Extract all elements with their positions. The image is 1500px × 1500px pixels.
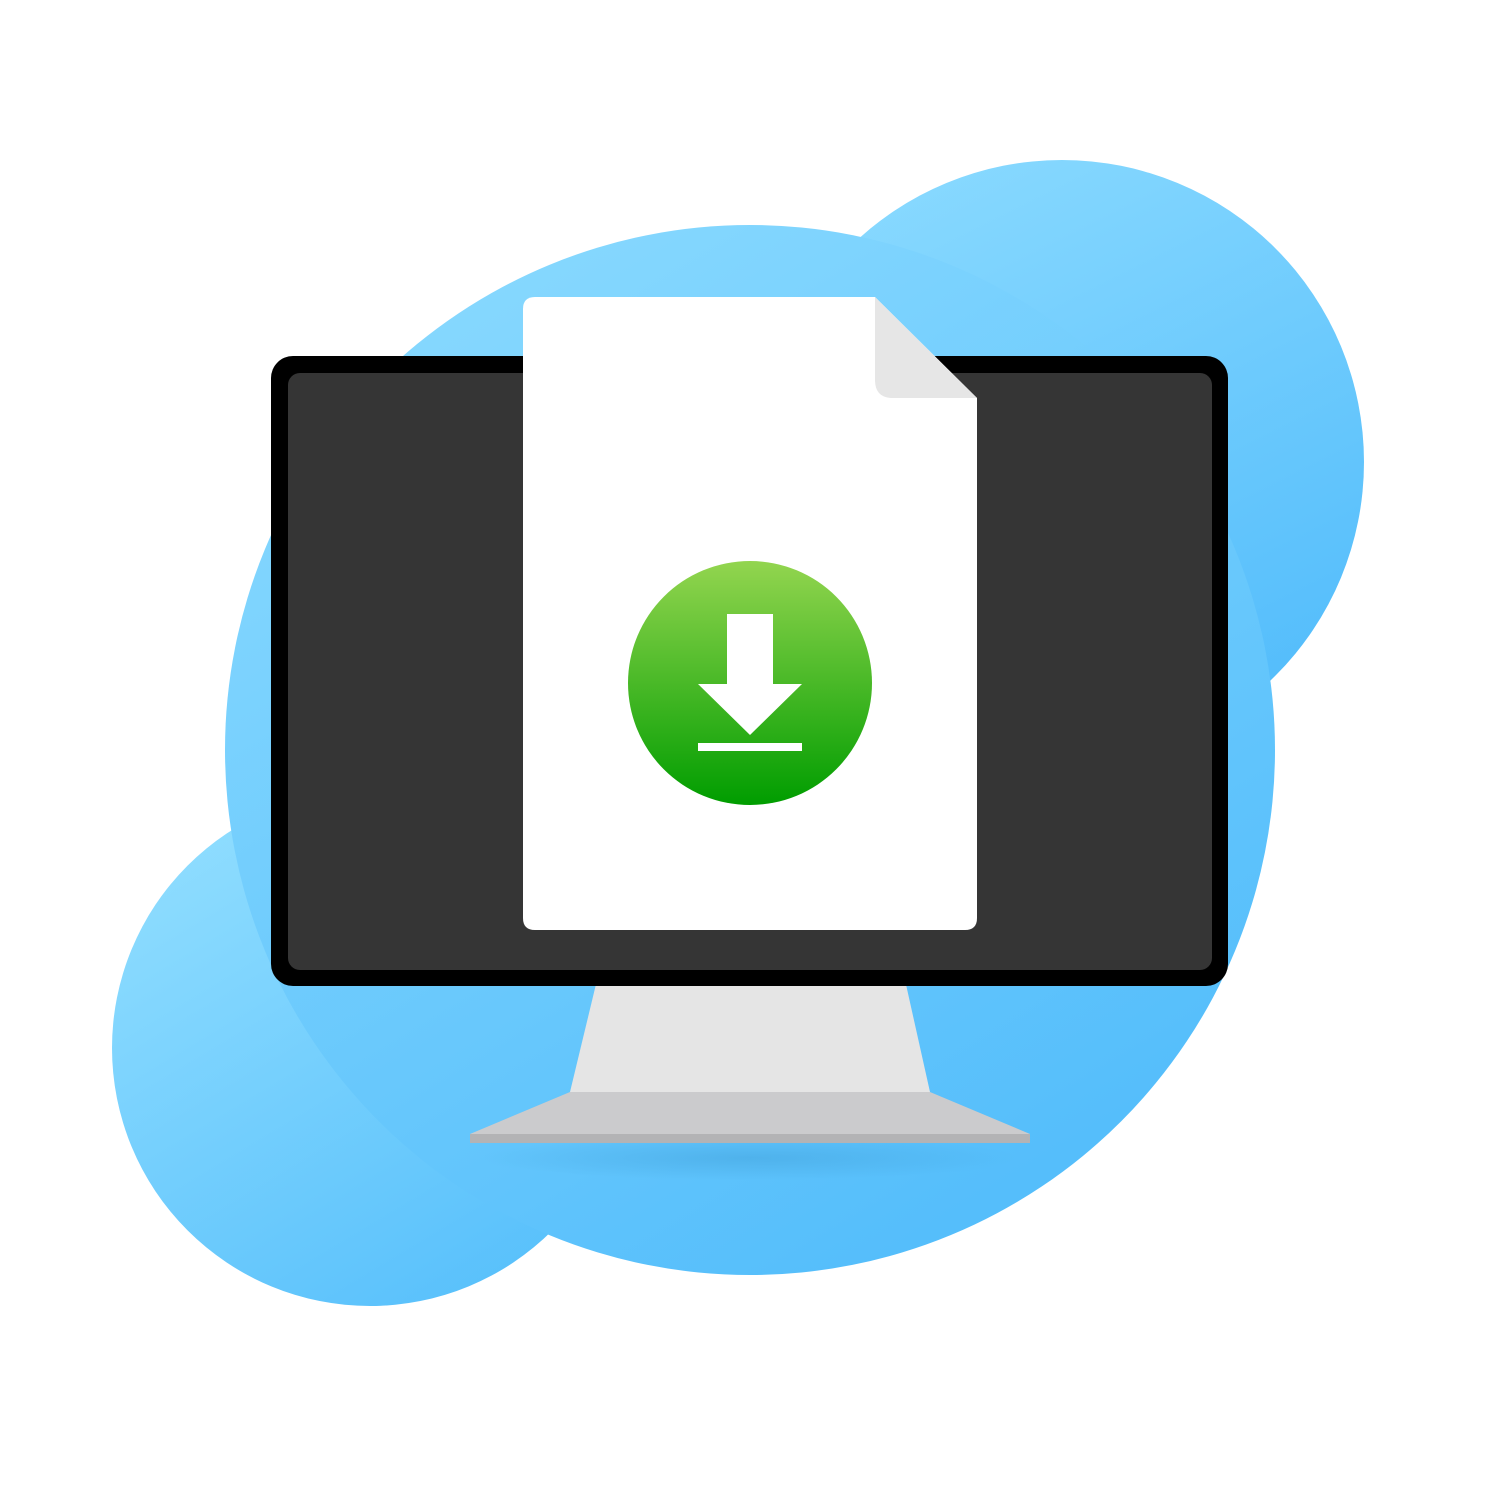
background blob: main circle — [225, 225, 1275, 1275]
download button icon — [628, 561, 872, 805]
monitor stand — [470, 980, 1030, 1143]
monitor stand shadow — [480, 1136, 1020, 1180]
monitor frame — [271, 356, 1228, 986]
background blob: top-right circle — [760, 160, 1364, 764]
folded corner — [875, 297, 977, 398]
background blob: bottom-left circle — [112, 790, 628, 1306]
document — [523, 297, 977, 930]
